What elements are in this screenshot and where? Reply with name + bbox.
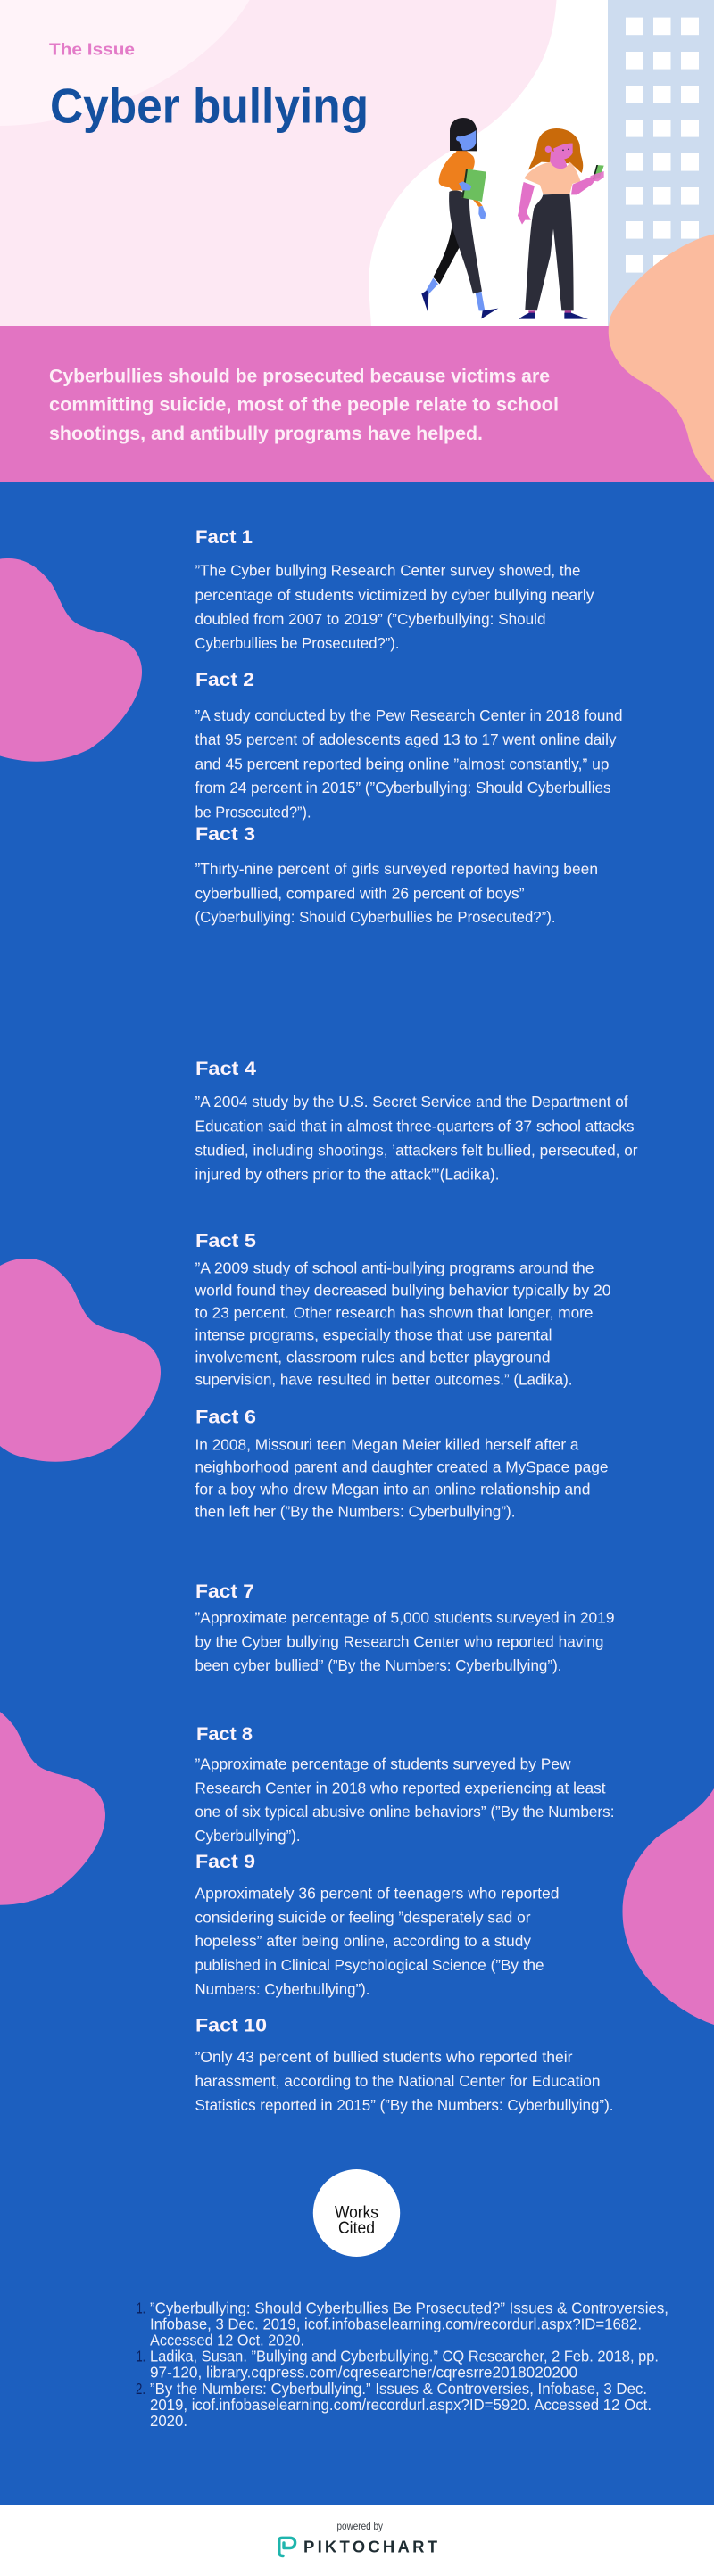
fact 5 body: intense programs, especially those that use parental xyxy=(195,1326,552,1344)
fact 10 body: ”Only 43 percent of bullied students who reported their xyxy=(195,2048,573,2066)
fact 9 xyxy=(195,1852,559,1998)
panel: footer xyxy=(0,2505,714,2576)
fact 1 xyxy=(195,527,594,652)
fact 8 body: ”Approximate percentage of students surveyed by Pew xyxy=(195,1754,571,1772)
works cited list: 2. xyxy=(136,2380,145,2398)
panel: header xyxy=(0,0,714,326)
fact 5 heading: Fact 5 xyxy=(195,1231,256,1251)
panel: thesis band xyxy=(0,326,714,482)
works cited list: 97-120, library.cqpress.com/cqresearcher/cqresrre2018020200 xyxy=(150,2364,577,2382)
fact 1 body: percentage of students victimized by cyber bullying nearly xyxy=(195,586,594,604)
background blob: pale pink xyxy=(0,0,557,326)
fact 10 body xyxy=(195,2048,614,2114)
works cited badge: Works xyxy=(335,2204,378,2223)
fact 7 heading: Fact 7 xyxy=(195,1581,254,1602)
fact 7 body: been cyber bullied” (”By the Numbers: Cyberbullying”). xyxy=(195,1656,562,1674)
fact 9 body: published in Clinical Psychological Science (”By the xyxy=(195,1956,544,1974)
fact 2 body: be Prosecuted?”). xyxy=(195,803,311,821)
fact 7 xyxy=(195,1581,614,1674)
fact 6 heading: Fact 6 xyxy=(195,1408,256,1428)
fact 9 body: considering suicide or feeling ”desperately sad or xyxy=(195,1909,531,1927)
eyebrow label: The Issue xyxy=(49,40,135,58)
piktochart wordmark: PIKTOCHART xyxy=(303,2538,438,2556)
fact 5 body: involvement, classroom rules and better playground xyxy=(195,1349,550,1366)
works cited badge: Cited xyxy=(338,2219,375,2238)
fact 10 body: Statistics reported in 2015” (”By the Numbers: Cyberbullying”). xyxy=(195,2096,614,2114)
works cited list: Accessed 12 Oct. 2020. xyxy=(150,2331,304,2349)
fact 5 body: ”A 2009 study of school anti-bullying programs around the xyxy=(195,1259,594,1277)
figure: woman with phone xyxy=(518,128,604,319)
fact 2 body: that 95 percent of adolescents aged 13 to 17 went online daily xyxy=(195,731,617,748)
thesis text: committing suicide, most of the people relate to school xyxy=(49,394,559,416)
fact 8 body: Cyberbullying”). xyxy=(195,1827,300,1845)
works cited list: Infobase, 3 Dec. 2019, icof.infobaselearning.com/recordurl.aspx?ID=1682. xyxy=(150,2316,642,2333)
fact 2 body: from 24 percent in 2015” (”Cyberbullying: Should Cyberbullies xyxy=(195,779,611,797)
thesis text: shootings, and antibully programs have helped. xyxy=(49,423,483,444)
fact 5 body: world found they decreased bullying behavior typically by 20 xyxy=(194,1282,611,1300)
fact 8 body xyxy=(195,1754,614,1845)
fact 5 body: supervision, have resulted in better outcomes.” (Ladika). xyxy=(195,1370,573,1388)
fact 4 body: studied, including shootings, ’attackers felt bullied, persecuted, or xyxy=(195,1142,638,1160)
fact 3 heading: Fact 3 xyxy=(195,824,255,845)
thesis text xyxy=(49,366,559,444)
works cited list: 1. xyxy=(137,2348,145,2365)
fact 2 heading: Fact 2 xyxy=(195,670,254,690)
building xyxy=(608,0,714,326)
fact 3 xyxy=(195,824,598,926)
fact 10 xyxy=(195,2016,614,2114)
fact 3 body: (Cyberbullying: Should Cyberbullies be Prosecuted?”). xyxy=(195,908,555,926)
thesis text: Cyberbullies should be prosecuted because victims are xyxy=(49,366,550,387)
icon: piktochart logo xyxy=(279,2538,295,2556)
powered by label: powered by xyxy=(337,2522,383,2532)
fact 8 body: one of six typical abusive online behaviors” (”By the Numbers: xyxy=(195,1803,614,1821)
blob: pink left 2 xyxy=(0,1259,161,1462)
blob: pink left 1 xyxy=(0,558,142,762)
fact 4 xyxy=(195,1059,638,1183)
decorative blob: peach xyxy=(609,234,714,481)
fact 4 body: injured by others prior to the attack”’(Ladika). xyxy=(195,1165,500,1183)
fact 8 heading: Fact 8 xyxy=(196,1724,253,1745)
works cited list: ”Cyberbullying: Should Cyberbullies Be Prosecuted?” Issues & Controversies, xyxy=(150,2299,668,2317)
fact 4 body: Education said that in almost three-quarters of 37 school attacks xyxy=(195,1117,635,1135)
fact 6 body: then left her (”By the Numbers: Cyberbullying”). xyxy=(195,1502,516,1520)
fact 1 body: ”The Cyber bullying Research Center survey showed, the xyxy=(195,562,580,580)
fact 9 body: Approximately 36 percent of teenagers who reported xyxy=(195,1884,559,1902)
fact 6 body: neighborhood parent and daughter created a MySpace page xyxy=(195,1457,609,1475)
fact 2 body: and 45 percent reported being online ”almost constantly,” up xyxy=(195,755,609,772)
fact 7 body: ”Approximate percentage of 5,000 students surveyed in 2019 xyxy=(195,1609,614,1627)
fact 2 xyxy=(195,670,623,821)
figure: woman with folder xyxy=(421,118,498,318)
fact 1 body: doubled from 2007 to 2019” (”Cyberbullying: Should xyxy=(195,610,546,628)
fact 8 body: Research Center in 2018 who reported experiencing at least xyxy=(195,1779,606,1796)
fact 6 body xyxy=(195,1436,609,1520)
fact 6 xyxy=(195,1408,609,1520)
fact 7 body xyxy=(195,1609,614,1674)
works cited list: 2019, icof.infobaselearning.com/recordurl.aspx?ID=5920. Accessed 12 Oct. xyxy=(150,2396,652,2414)
blob: pink left 3 xyxy=(0,1702,105,1905)
fact 10 body: harassment, according to the National Center for Education xyxy=(195,2072,600,2090)
works cited list: Ladika, Susan. ”Bullying and Cyberbullying.” CQ Researcher, 2 Feb. 2018, pp. xyxy=(150,2348,659,2365)
fact 9 body xyxy=(195,1884,559,1998)
works cited list xyxy=(136,2299,668,2430)
fact 1 body: Cyberbullies be Prosecuted?”). xyxy=(195,634,400,652)
fact 1 heading: Fact 1 xyxy=(195,527,253,548)
works cited list: ”By the Numbers: Cyberbullying.” Issues & Controversies, Infobase, 3 Dec. xyxy=(150,2380,647,2398)
fact 2 body: ”A study conducted by the Pew Research Center in 2018 found xyxy=(195,706,623,724)
fact 8 xyxy=(195,1724,614,1845)
fact 2 body xyxy=(195,706,623,821)
fact 4 body xyxy=(195,1093,638,1183)
works cited list: 2020. xyxy=(150,2412,187,2430)
fact 3 body: cyberbullied, compared with 26 percent of boys” xyxy=(195,885,525,903)
fact 5 body xyxy=(194,1259,611,1388)
fact 3 body xyxy=(195,860,598,926)
fact 4 body: ”A 2004 study by the U.S. Secret Service and the Department of xyxy=(195,1093,628,1110)
works cited list: 1. xyxy=(137,2299,145,2317)
fact 9 heading: Fact 9 xyxy=(195,1852,255,1872)
fact 6 body: In 2008, Missouri teen Megan Meier killed herself after a xyxy=(195,1436,579,1454)
fact 7 body: by the Cyber bullying Research Center who reported having xyxy=(195,1632,603,1650)
fact 5 xyxy=(194,1231,611,1388)
blob: pink right xyxy=(623,1788,714,2025)
panel: facts background xyxy=(0,482,714,2505)
fact 9 body: hopeless” after being online, according to a study xyxy=(195,1932,531,1950)
title: Cyber bullying xyxy=(50,78,369,134)
fact 5 body: to 23 percent. Other research has shown that longer, more xyxy=(195,1303,593,1321)
fact 3 body: ”Thirty-nine percent of girls surveyed reported having been xyxy=(195,860,598,878)
fact 6 body: for a boy who drew Megan into an online relationship and xyxy=(195,1480,591,1498)
fact 4 heading: Fact 4 xyxy=(195,1059,256,1079)
background blob: lighter pink xyxy=(0,0,250,126)
fact 9 body: Numbers: Cyberbullying”). xyxy=(195,1980,369,1998)
illustration: two women walking xyxy=(421,118,604,319)
works cited badge xyxy=(313,2169,400,2257)
fact 1 body xyxy=(195,562,594,652)
fact 10 heading: Fact 10 xyxy=(195,2016,267,2036)
